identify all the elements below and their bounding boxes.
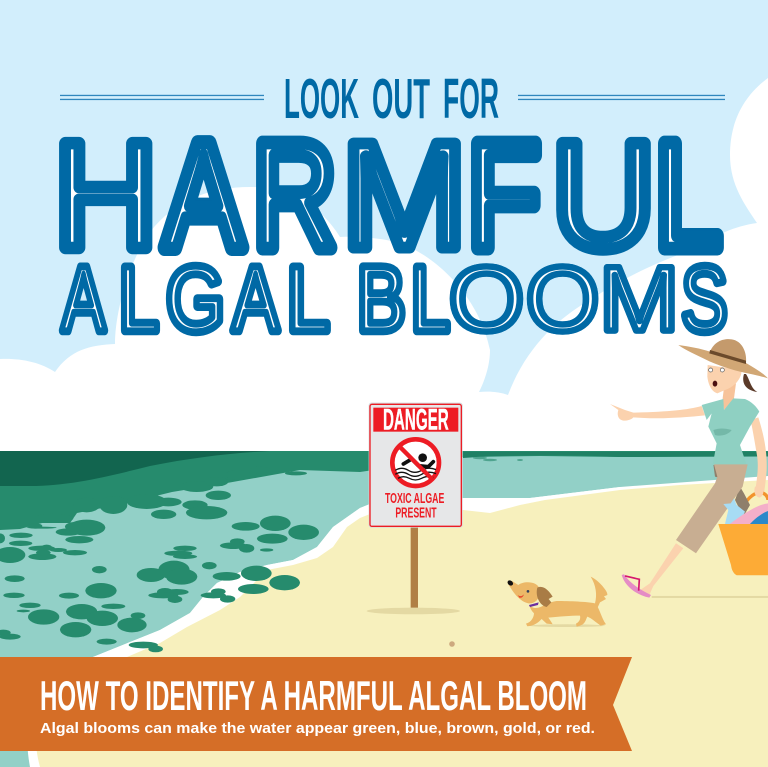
dog head: [507, 581, 540, 603]
sea: [0, 451, 768, 660]
algal blooms inlined words: A: [62, 248, 105, 350]
sand: [0, 480, 768, 767]
algal blooms outer outline: S: [681, 248, 727, 350]
dog ear: [537, 587, 553, 607]
neck: [723, 383, 736, 410]
harmful inlined word: U: [552, 110, 656, 280]
danger sign: [367, 403, 463, 614]
text: FOR: [443, 67, 499, 131]
title: algal blooms: [62, 248, 727, 350]
clouds: [0, 78, 768, 460]
present text: PRESENT: [395, 505, 437, 521]
danger word: DANGER: [383, 403, 449, 436]
dog mouth: [518, 594, 524, 598]
harmful outer outline: L: [654, 110, 722, 280]
algal blooms outer outline: M: [599, 248, 679, 350]
banner ribbon: [0, 657, 632, 751]
title: look out for: OUT: [372, 67, 430, 131]
algal blooms outer outline: A: [62, 248, 105, 350]
ponytail: [743, 374, 757, 392]
dog nose: [507, 579, 514, 587]
dog collar: [529, 602, 539, 607]
algal blooms outer outline: L: [119, 248, 159, 350]
pebble: [449, 641, 455, 647]
sandal: [622, 574, 651, 598]
shadow under woman: [652, 596, 768, 598]
harmful inlined word: R: [253, 110, 337, 280]
woman: [610, 339, 768, 598]
algal blooms inlined words: B: [357, 248, 406, 350]
harmful inlined word: A: [164, 110, 243, 280]
algal blooms inlined words: L: [411, 248, 450, 350]
harmful outer outline: R: [253, 110, 337, 280]
dark water band: [0, 451, 270, 486]
algal blooms inlined words: A: [232, 248, 279, 350]
basket: [718, 524, 768, 575]
shirt fold: [713, 428, 732, 436]
banner: [0, 657, 632, 751]
algal blooms inlined words: G: [166, 248, 225, 350]
pants: [676, 464, 748, 553]
title: harmful: [54, 110, 721, 280]
harmful inlined word: M: [341, 110, 467, 280]
algal blooms inlined words: O: [526, 248, 600, 350]
deep green water: [0, 451, 768, 535]
dog body and legs: [526, 601, 606, 627]
mouth: [713, 381, 717, 387]
thin dark line along right sea: [463, 452, 768, 458]
algal blooms outer outline: L: [411, 248, 450, 350]
algal blooms inlined words: S: [681, 248, 727, 350]
pointing arm and hand: [610, 404, 705, 421]
algal blooms outer outline: O: [448, 248, 524, 350]
danger band: [373, 408, 458, 432]
sign post: [411, 527, 418, 608]
no swimming icon: [392, 439, 439, 486]
title: look out for: LOOK: [284, 67, 359, 131]
harmful outer outline: A: [164, 110, 243, 280]
harmful outer outline: F: [468, 110, 540, 280]
hat: [678, 339, 768, 378]
algal blooms inlined words: M: [599, 248, 679, 350]
algal blooms inlined words: O: [448, 248, 524, 350]
algal blooms inlined words: L: [119, 248, 159, 350]
algal blooms outer outline: A: [232, 248, 279, 350]
harmful inlined word: H: [54, 110, 158, 280]
dog shadow: [528, 624, 605, 627]
sign board: [369, 403, 463, 528]
harmful outer outline: U: [552, 110, 656, 280]
foam: [0, 476, 768, 767]
algal blooms inlined words: L: [287, 248, 328, 350]
banner subtitle: Algal blooms can make the water appear green, blue, brown, gold, or red.: [40, 720, 595, 737]
far arm: [751, 417, 767, 493]
algae patches: [0, 471, 319, 652]
leg: [639, 543, 683, 595]
sky background: [0, 0, 768, 460]
algal blooms outer outline: O: [526, 248, 600, 350]
hand on basket: [754, 487, 764, 498]
toxic algae text: TOXIC ALGAE: [385, 491, 444, 507]
face: [707, 365, 742, 393]
title rule left: [60, 95, 264, 100]
distant algae flecks: [473, 457, 523, 461]
basket contents: [723, 498, 768, 526]
dog eye: [527, 590, 529, 593]
algal blooms outer outline: L: [287, 248, 328, 350]
dog tail: [591, 577, 607, 608]
algal blooms outer outline: G: [166, 248, 225, 350]
shirt: [702, 398, 759, 465]
back pants: [713, 464, 750, 517]
harmful inlined word: L: [654, 110, 722, 280]
algal blooms outer outline: B: [357, 248, 406, 350]
eyes: [709, 368, 724, 372]
title rule right: [518, 95, 725, 100]
dog: [507, 577, 607, 627]
basket handle: [741, 493, 768, 512]
harmful outer outline: M: [341, 110, 467, 280]
sign shadow: [367, 608, 460, 614]
shallow teal water: [0, 456, 768, 660]
harmful inlined word: F: [468, 110, 540, 280]
lower-left water: [0, 690, 30, 767]
green scalloped edge: [33, 467, 270, 523]
harmful outer outline: H: [54, 110, 158, 280]
